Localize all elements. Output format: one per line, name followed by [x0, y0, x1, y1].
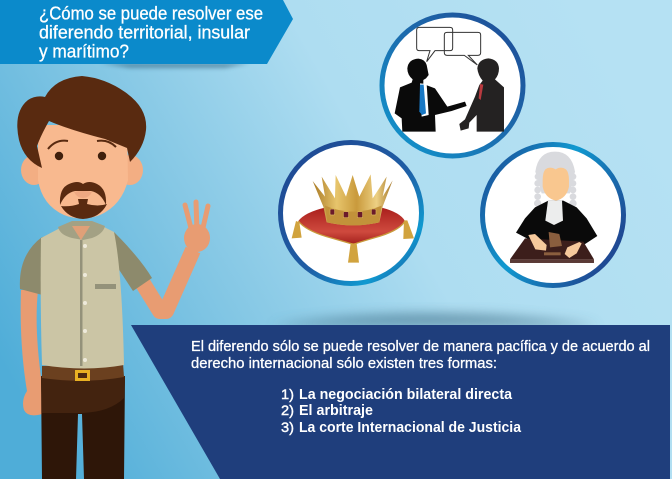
trousers: [41, 376, 125, 479]
numbered list: El arbitraje: [299, 403, 373, 419]
desk: [510, 238, 594, 259]
ears: [21, 155, 47, 185]
banner: question heading: diferendo territorial, insular: [39, 22, 250, 42]
intro text: El diferendo sólo se puede resolver de manera pacífica y de acuerdo al: [191, 338, 650, 355]
shirt sleeves: [20, 232, 152, 296]
jabot: [545, 201, 563, 225]
circle: bilateral negotiation: [382, 15, 523, 156]
numbered list: 1): [281, 386, 294, 402]
banner: question heading: ¿Cómo se puede resolver ese: [39, 4, 263, 24]
numbered list: [281, 386, 522, 436]
panel: three ways to resolve: derecho internacional sólo existen tres formas:: [191, 355, 497, 372]
hair: [17, 76, 146, 168]
panel: three ways to resolve: [131, 325, 670, 479]
circle: judge: [482, 144, 624, 286]
left arm and fist: [21, 290, 50, 415]
shadow under banner: [100, 63, 250, 68]
belt and buckle: [42, 363, 124, 381]
numbered list: 2): [281, 402, 294, 418]
illustration: man holding up three fingers: [17, 76, 210, 479]
numbered list: 3): [281, 419, 294, 435]
icon: two men talking: [395, 27, 504, 132]
numbered list: La negociación bilateral directa: [299, 387, 513, 403]
right arm: [142, 250, 193, 311]
face: [543, 168, 569, 201]
gavel: [549, 232, 562, 247]
left man: [395, 59, 467, 132]
robe: [516, 201, 597, 247]
right hand with three fingers: [184, 202, 210, 252]
eyebrows: [48, 141, 68, 149]
right man: [459, 58, 504, 132]
hands: [528, 234, 547, 251]
shadow above panel: [270, 314, 600, 326]
placket and pocket: [80, 240, 82, 366]
circle: crown on cushion: [280, 142, 422, 284]
speech bubbles: [417, 27, 453, 62]
banner: question heading: y marítimo?: [39, 42, 129, 62]
crown: [313, 174, 393, 225]
vest: [41, 227, 124, 368]
icon: crown on red cushion: [292, 174, 414, 263]
banner: question heading: [0, 0, 293, 64]
eyes: [55, 152, 63, 160]
collar: [58, 221, 105, 240]
tassels: [292, 221, 302, 238]
moustache and beard: [60, 182, 106, 205]
numbered list: La corte Internacional de Justicia: [299, 420, 522, 436]
wig: [534, 152, 577, 207]
icon: judge with gavel: [510, 152, 597, 263]
face: [38, 125, 128, 218]
crown jewels: [330, 209, 376, 218]
cushion: [298, 208, 405, 244]
